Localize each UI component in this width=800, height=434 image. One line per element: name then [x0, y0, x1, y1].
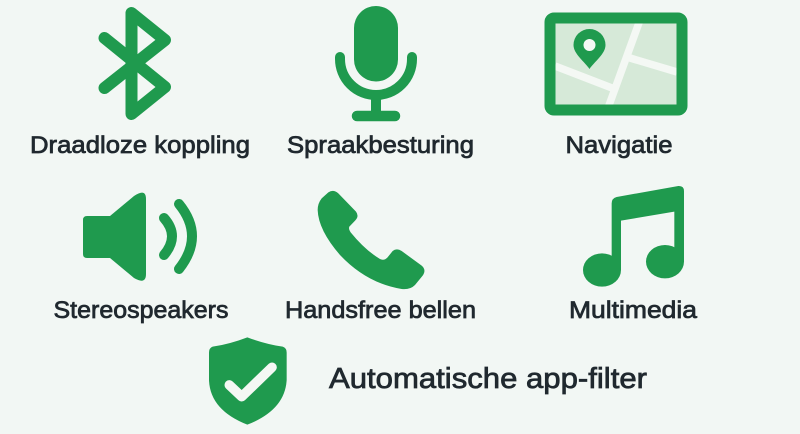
- icon: shield with check: [209, 337, 287, 425]
- label: Handsfree bellen: Handsfree bellen: [285, 297, 476, 324]
- icon: music note: [583, 186, 684, 287]
- label: Spraakbesturing: Spraakbesturing: [287, 132, 474, 159]
- label: Automatische app-filter: Automatische app-filter: [329, 363, 647, 395]
- label: Multimedia: Multimedia: [569, 297, 697, 324]
- label: Draadloze koppling: Draadloze koppling: [30, 132, 250, 159]
- icon: phone: [318, 191, 424, 289]
- label: Stereospeakers: Stereospeakers: [54, 297, 229, 324]
- icon: microphone: [340, 6, 412, 116]
- icon: map with pin: [550, 18, 682, 110]
- icon: speaker: [83, 193, 192, 281]
- label: Navigatie: Navigatie: [566, 132, 672, 159]
- icon: bluetooth: [104, 13, 165, 114]
